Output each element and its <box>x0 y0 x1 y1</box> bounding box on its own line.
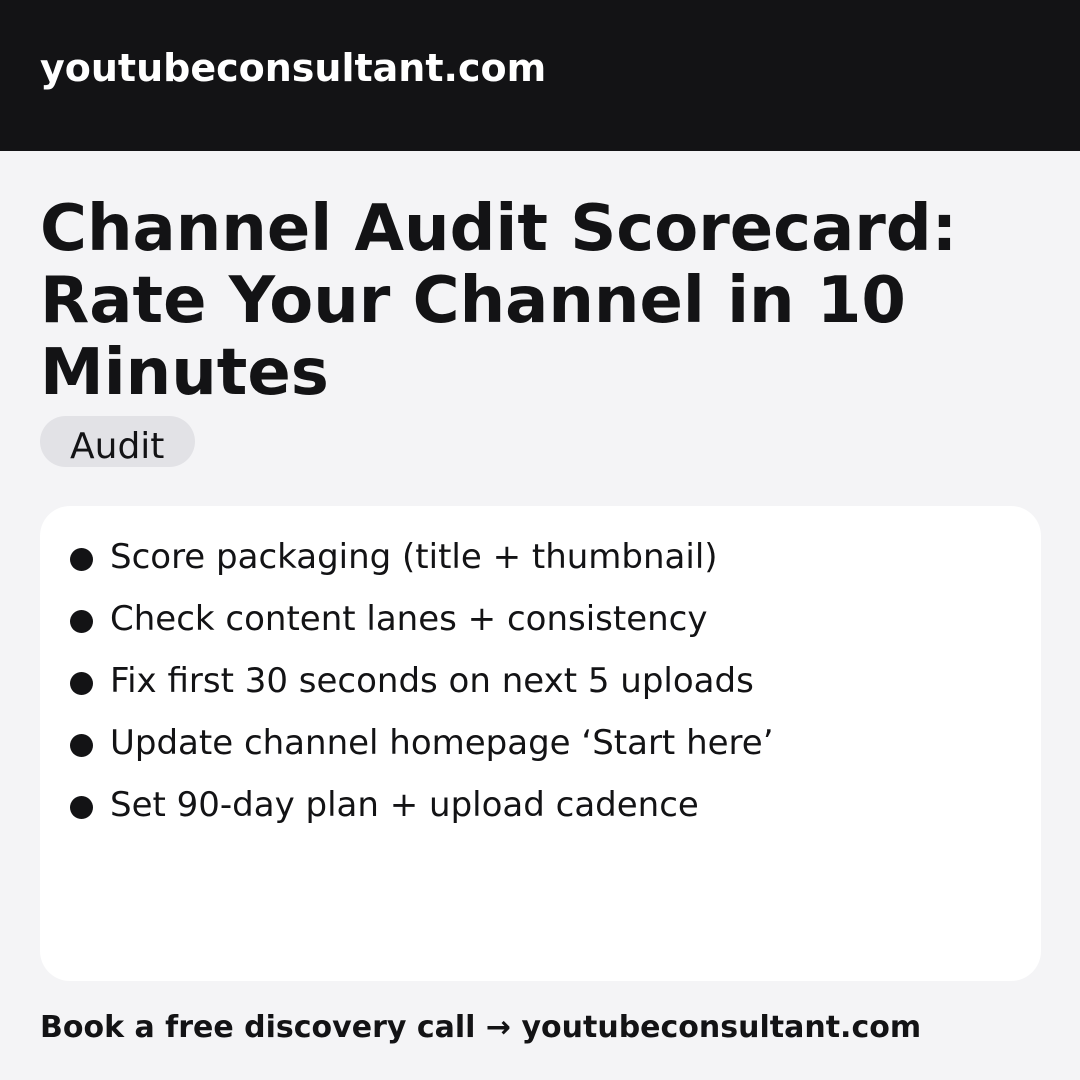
panel: checklist <box>40 506 1041 981</box>
panel: checklist: Fix first 30 seconds on next 5 uploads <box>110 661 754 701</box>
footer call to action: Book a free discovery call → youtubeconsultant.com <box>40 1010 921 1045</box>
item 5 <box>70 785 699 825</box>
item 1 <box>70 537 718 577</box>
title: Channel Audit Scorecard: Rate Your Channel in 10 Minutes <box>40 192 957 410</box>
panel: checklist: Update channel homepage ‘Start here’ <box>110 723 774 763</box>
tag: Audit <box>40 416 195 467</box>
panel: checklist: Score packaging (title + thumbnail) <box>110 537 718 577</box>
tag: Audit: Audit <box>70 426 164 467</box>
panel: checklist: Set 90-day plan + upload cadence <box>110 785 699 825</box>
header bar <box>0 0 1080 151</box>
item 4 <box>70 723 774 763</box>
item 3 <box>70 661 754 701</box>
brand name: youtubeconsultant.com <box>40 46 546 90</box>
panel: checklist: Check content lanes + consistency <box>110 599 707 639</box>
item 2 <box>70 599 707 639</box>
